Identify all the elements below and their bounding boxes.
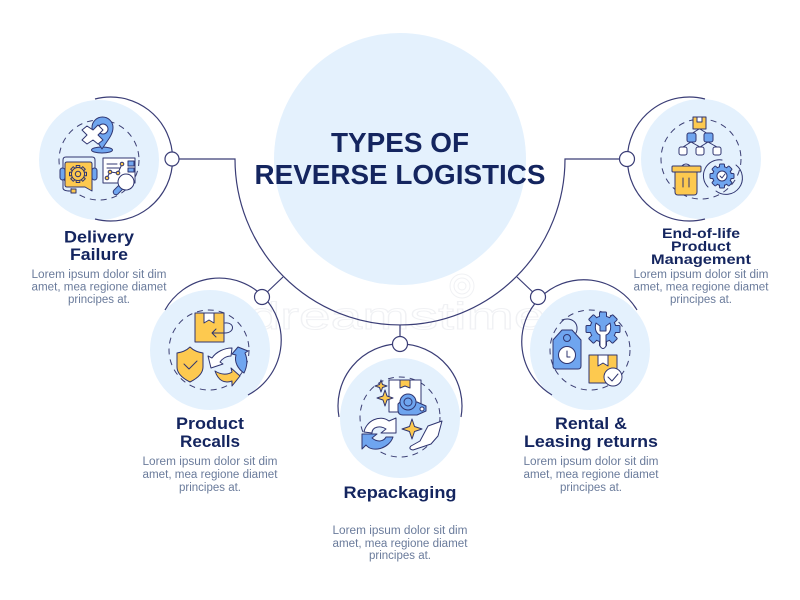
central circle	[274, 33, 526, 285]
label: product: Product	[671, 238, 731, 254]
icon: gear with cycle	[703, 160, 742, 194]
label: rental and leasing: Rental &	[555, 414, 627, 433]
text: rental description: Lorem ipsum dolor sit dim	[524, 456, 658, 468]
icon: support chat gear	[60, 157, 97, 193]
text: product recalls description: Lorem ipsum dolor sit dim	[142, 456, 278, 468]
icon: returned box	[195, 313, 232, 342]
label: leasing returns: Leasing returns	[524, 432, 658, 451]
text: repackaging description	[332, 525, 468, 562]
icon: chart with magnifier	[103, 158, 135, 192]
text: repackaging description: principes at.	[369, 550, 431, 562]
connector arc	[172, 159, 627, 344]
icon: open hand	[410, 421, 442, 450]
text: end-of-life description: principes at.	[670, 294, 732, 306]
text: delivery description: Lorem ipsum dolor sit dim	[32, 269, 166, 281]
icon: box with check badge	[589, 355, 622, 386]
text: end-of-life description	[634, 269, 769, 306]
text: rental description: principes at.	[560, 482, 622, 494]
icon: gear with wrench	[586, 312, 620, 348]
label: recalls: Recalls	[180, 432, 240, 451]
panel: product recalls	[142, 278, 281, 494]
text: product recalls description: amet, mea regione diamet	[142, 469, 278, 481]
label: management: Management	[651, 251, 751, 267]
watermark	[248, 274, 546, 338]
label: failure: Failure	[70, 245, 128, 264]
text: delivery description: amet, mea regione diamet	[32, 282, 167, 294]
icon: hierarchy tree	[679, 117, 721, 155]
text: end-of-life description: amet, mea regione diamet	[634, 282, 769, 294]
icon: shield with check	[177, 347, 203, 382]
icon: sparkles	[375, 380, 422, 439]
label: repackaging: Repackaging	[344, 483, 456, 502]
text: delivery description: principes at.	[68, 294, 130, 306]
text: delivery description	[32, 269, 167, 306]
panel: rental and leasing returns	[522, 280, 659, 494]
text: repackaging description: amet, mea regione diamet	[332, 538, 468, 550]
label: product recalls: Product	[176, 414, 244, 433]
text: end-of-life description: Lorem ipsum dolor sit dim	[634, 269, 768, 281]
panel: repackaging	[332, 336, 468, 562]
text: rental description: amet, mea regione diamet	[524, 469, 659, 481]
label: delivery failure: Delivery	[64, 228, 135, 246]
icon: box with tape	[389, 380, 426, 415]
text: rental description	[524, 456, 659, 494]
icon: refresh arrows	[362, 418, 396, 449]
label: end-of-life: End-of-life	[662, 225, 740, 241]
icon: trash can	[672, 164, 701, 195]
text: product recalls description	[142, 456, 278, 494]
title: REVERSE LOGISTICS	[254, 159, 546, 190]
watermark: dreamstime	[248, 296, 546, 338]
text: product recalls description: principes at.	[179, 482, 241, 494]
text: repackaging description: Lorem ipsum dolor sit dim	[332, 525, 468, 537]
panel: delivery failure	[32, 97, 179, 306]
icon: cycle arrows	[208, 347, 248, 386]
panel: end-of-life product management	[620, 97, 769, 306]
title: TYPES OF	[331, 127, 469, 158]
icon: map pin with cross	[82, 117, 113, 153]
title	[254, 127, 546, 190]
icon: price tag with clock	[553, 319, 581, 369]
